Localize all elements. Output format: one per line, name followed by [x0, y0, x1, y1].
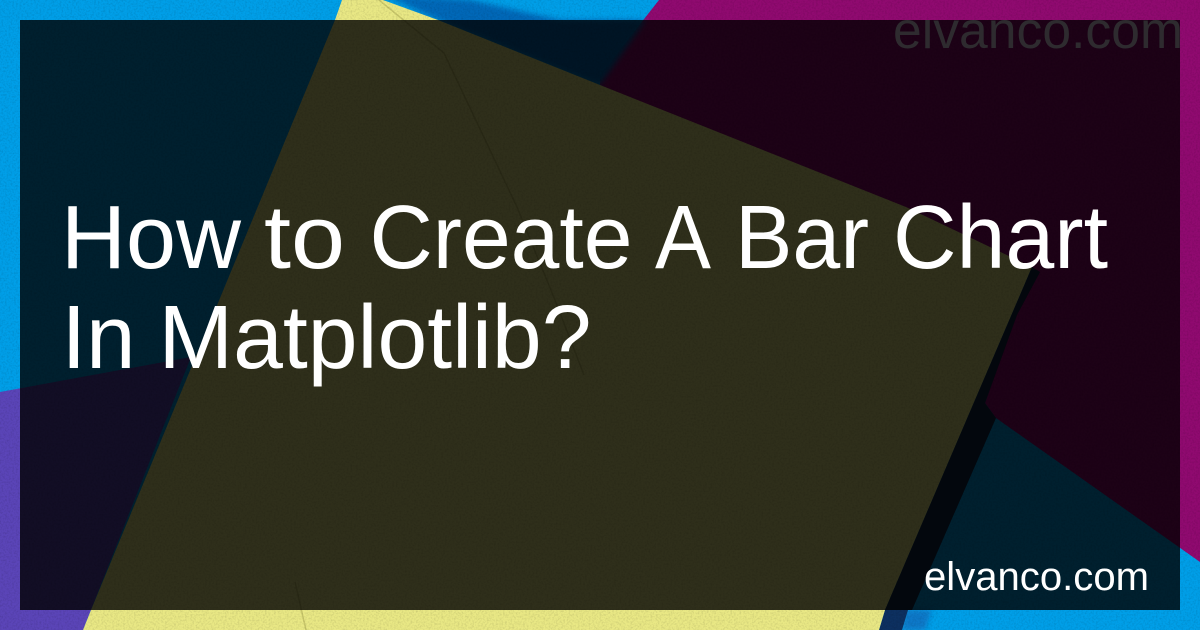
fold lines on yellow paper	[300, 0, 404, 630]
title: Matplotlib?	[158, 288, 592, 388]
title: Chart	[893, 188, 1108, 288]
paper: yellow	[83, 0, 1032, 630]
title: Bar	[735, 188, 869, 288]
title: How	[61, 188, 242, 288]
shadow band inside the panel	[885, 267, 1040, 610]
watermark top right: elvanco.com	[893, 2, 1183, 60]
title: A	[655, 188, 711, 288]
shadow: dark navy strip below panel	[879, 610, 908, 630]
title: In	[62, 288, 136, 388]
shadow: lower gradient beside yellow paper	[902, 610, 932, 630]
title	[61, 188, 1108, 388]
shadow: upper wedge of yellow paper	[383, 0, 646, 85]
title: Create	[370, 188, 632, 288]
site label bottom right: elvanco.com	[924, 555, 1149, 599]
title: to	[264, 188, 345, 288]
paper: magenta	[600, 0, 1200, 562]
paper: purple	[0, 357, 191, 630]
